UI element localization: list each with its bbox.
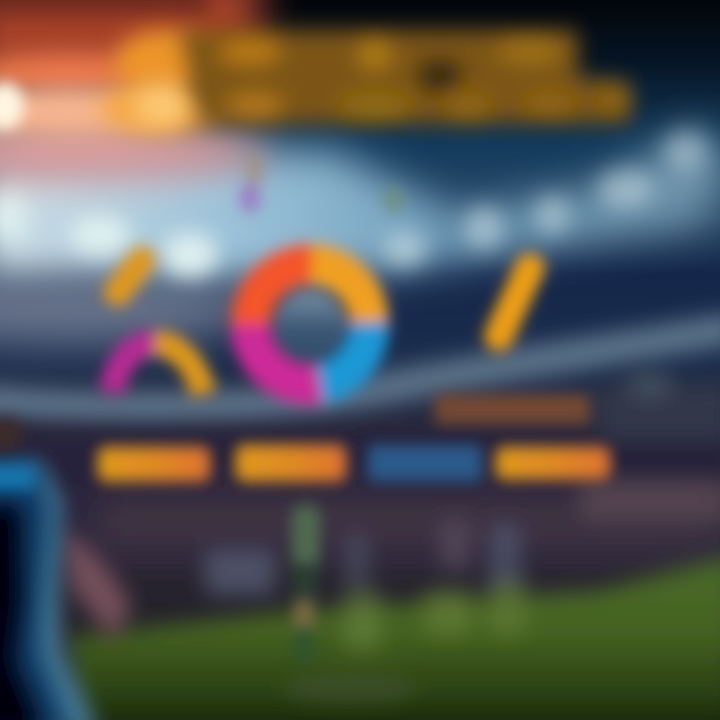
stadium roof arc (0, 328, 720, 408)
small icon: purple marker (239, 152, 264, 213)
pitch (70, 555, 720, 720)
pill icon, right (499, 268, 530, 336)
small arc chart, left (112, 342, 204, 394)
sunset glow, top left (0, 0, 270, 178)
donut segment: magenta (251, 325, 320, 385)
donut chart, centre (251, 264, 369, 385)
distant player figure (292, 505, 320, 660)
title block (illegible in reference) (100, 30, 630, 134)
donut segment: red-orange (251, 264, 312, 325)
sky glow band (0, 125, 720, 345)
small icon: green marker (385, 188, 403, 212)
floodlight spots (0, 130, 707, 277)
brown label (435, 394, 590, 424)
foreground player (0, 416, 132, 720)
button row (98, 445, 610, 481)
button 3 (368, 445, 482, 481)
button 2 (236, 445, 346, 481)
donut segment: amber (312, 264, 369, 322)
donut hole (270, 290, 350, 370)
donut segment: blue (320, 322, 369, 384)
grey haze below floodlights (0, 275, 260, 345)
crowd stands (0, 371, 720, 595)
pill icon, upper left (118, 260, 142, 292)
button 1 (98, 447, 210, 481)
pitch highlights (280, 580, 525, 702)
arc segment: amber (155, 342, 204, 394)
arc segment: magenta (112, 342, 155, 392)
button 4 (496, 447, 610, 479)
